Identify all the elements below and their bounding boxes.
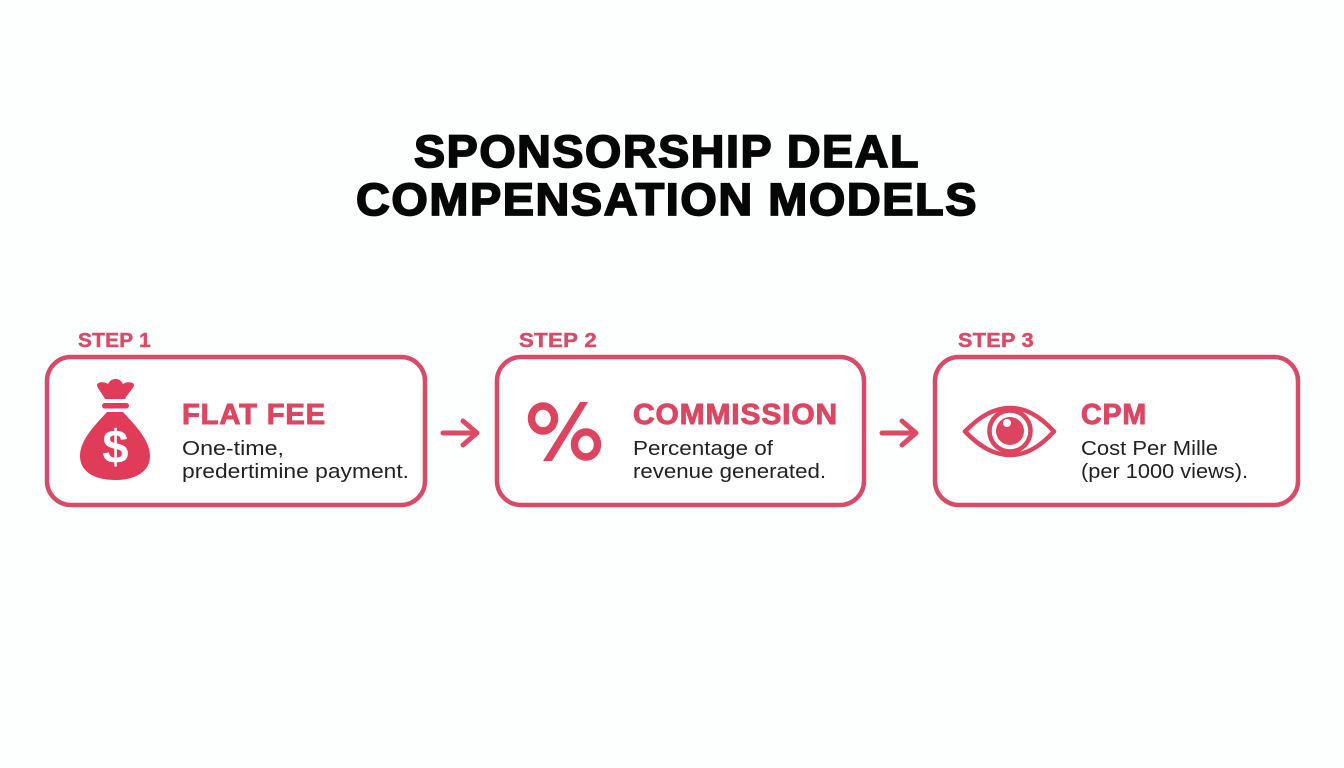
flat fee description [182, 438, 409, 483]
title: SPONSORSHIP DEAL [414, 126, 920, 177]
panel: step 2 commission [497, 329, 864, 505]
arrow: step 1 to step 2 [443, 421, 477, 445]
icon: percent [532, 402, 598, 461]
icon: eye [965, 408, 1054, 455]
cpm description: (per 1000 views). [1081, 461, 1248, 483]
flat fee heading: FLAT FEE [182, 399, 326, 431]
flat fee description: One-time, [182, 438, 284, 460]
panel: step 1 flat fee [47, 329, 425, 505]
panel: step 3 cpm [935, 329, 1298, 505]
step 1 label: STEP 1 [78, 329, 151, 352]
cpm description: Cost Per Mille [1081, 438, 1218, 460]
step 2 card frame [497, 357, 864, 505]
icon: money bag [80, 379, 150, 480]
title: COMPENSATION MODELS [356, 174, 978, 225]
cpm description [1081, 438, 1248, 483]
commission description: revenue generated. [633, 461, 826, 483]
commission description [633, 438, 826, 483]
commission description: Percentage of [633, 438, 773, 460]
cpm heading: CPM [1081, 399, 1147, 431]
step 1 card frame [47, 357, 425, 505]
arrow: step 2 to step 3 [882, 421, 916, 445]
step 2 label: STEP 2 [519, 329, 597, 352]
title [356, 126, 978, 225]
commission heading: COMMISSION [633, 399, 838, 431]
flat fee description: predertimine payment. [182, 461, 409, 483]
step 3 card frame [935, 357, 1298, 505]
step 3 label: STEP 3 [958, 329, 1034, 352]
icon: money bag: $ [102, 420, 129, 473]
